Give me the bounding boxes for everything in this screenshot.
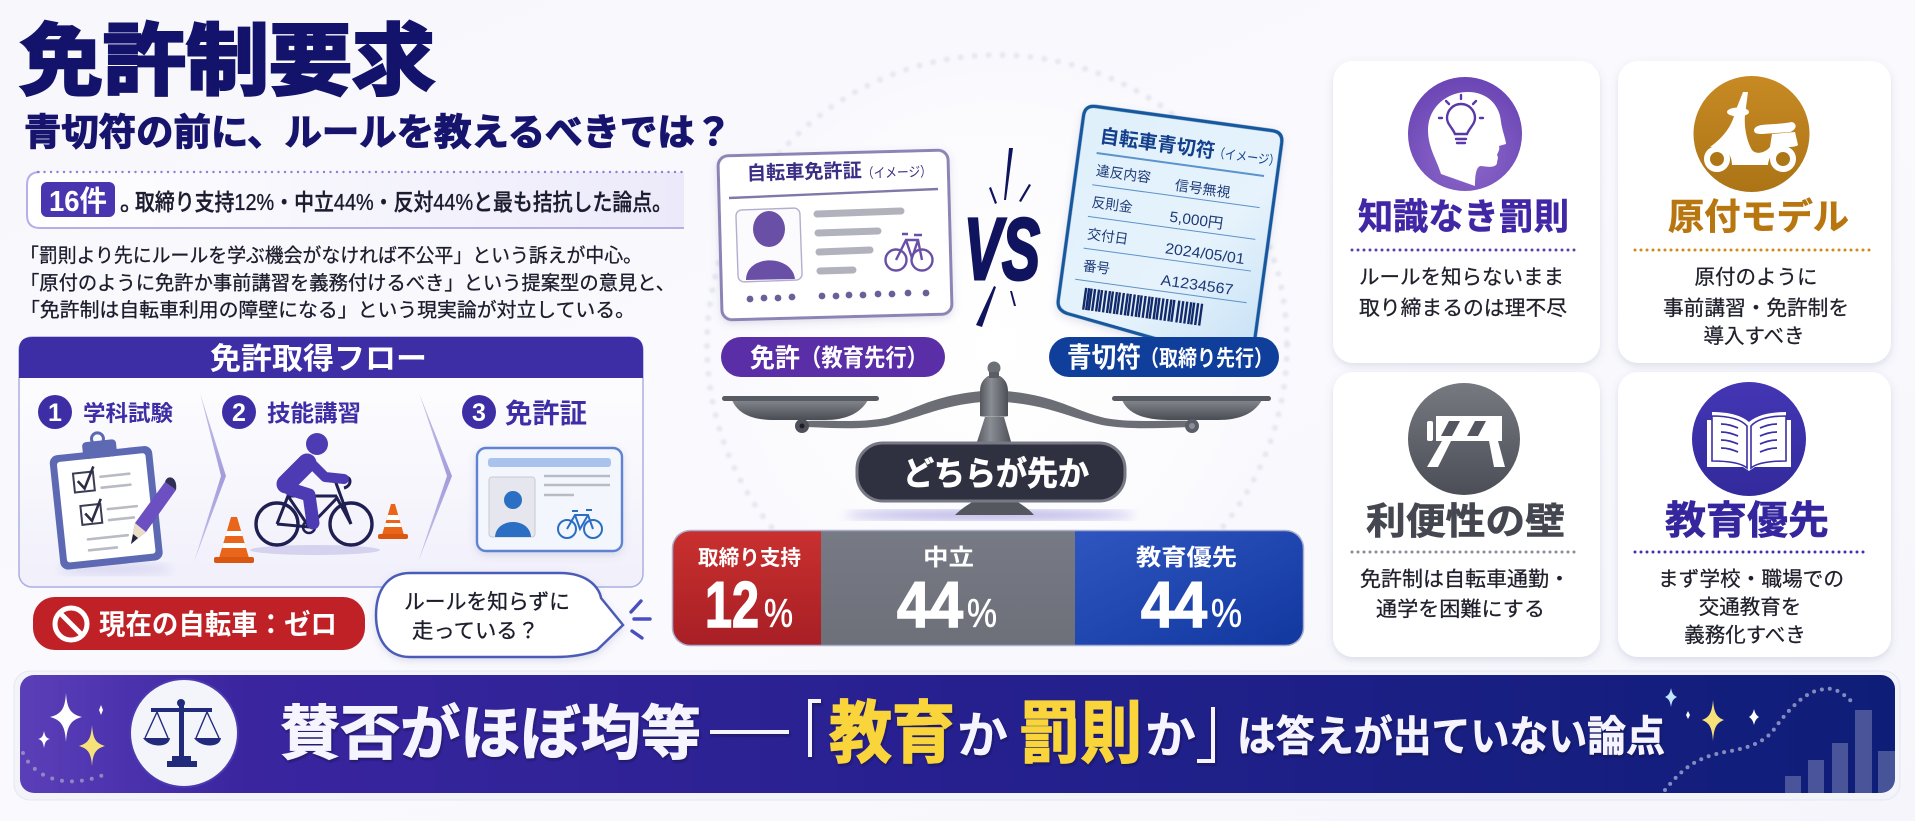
callout: current bicycle zero [33,597,365,650]
icon: open book [1692,382,1806,496]
card body: 導入すべき [1703,325,1805,348]
banner message: 教育 [829,696,955,772]
flow heading: 免許取得フロー [210,343,427,376]
stat: education first: 44 [1141,568,1207,641]
blue ticket illustration: 反則金 [1091,194,1134,215]
card title: 自転車免許証 [747,159,862,185]
scale plate: どちらが先か [903,455,1089,492]
card body [1359,266,1567,320]
right pan [1112,396,1271,433]
body paragraph: 「原付のように免許か事前講習を義務付けるべき」という提案型の意見と、 [20,272,675,294]
step 3 label: 免許証 [505,399,587,429]
step 3 label [462,395,587,429]
blue ticket illustration: （イメージ） [1213,145,1281,169]
body paragraph [20,245,675,322]
blue ticket illustration [1053,105,1284,366]
stat: education first: % [1211,592,1242,636]
left pan [722,396,879,433]
label: license: （教育先行） [800,345,928,372]
summary box [27,172,684,228]
card body: 交通教育を [1699,596,1801,619]
card heading: 利便性の壁 [1366,501,1565,542]
card body: 事前講習・免許制を [1663,297,1849,320]
icon: clipboard [47,427,176,575]
blue ticket illustration: 交付日 [1086,226,1129,247]
decoration: left sparkles [23,693,108,781]
title: 免許制要求 [20,17,435,105]
card body [1360,568,1570,621]
step 1 label: 学科試験 [83,401,173,426]
panel: convenience wall [1333,372,1600,657]
summary text: 取締り支持12%・中立44%・反対44%と最も拮抗した論点。 [135,189,672,215]
label: ticket: 青切符 [1067,342,1141,373]
speech bubble [376,573,623,657]
blue ticket illustration: 番号 [1082,257,1111,277]
card body: 通学を困難にする [1376,598,1545,621]
icon: scales of justice [130,679,238,787]
banner message: は答えが出ていない論点 [1237,713,1665,760]
card note: （イメージ） [862,164,932,181]
speech bubble: 走っている？ [412,620,539,643]
step 2 label: 2 [232,399,246,427]
stat: education first [1075,531,1303,645]
stat: enforcement support: 12 [705,568,759,641]
blue ticket illustration: 自転車青切符 [1098,125,1216,163]
icon: head with bulb [1408,77,1522,191]
label: license [721,337,945,377]
card body: 取り締まるのは理不尽 [1359,297,1567,320]
stat: neutral: 中立 [923,544,974,570]
icon: license card [477,448,622,551]
VS mark: VS [964,201,1040,298]
stat: enforcement support: % [764,592,793,636]
blue ticket illustration: 5,000円 [1168,209,1224,233]
icon: barricade [1408,383,1520,495]
decorative halo [707,55,1287,635]
card heading: 知識なき罰則 [1358,196,1569,237]
panel: education first [1618,372,1891,657]
card body: ルールを知らないまま [1359,266,1564,289]
banner message: 罰則 [1019,696,1142,772]
callout text: 現在の自転車：ゼロ [99,609,337,640]
blue ticket illustration: A1234567 [1160,272,1234,299]
icon: scooter [1694,76,1810,192]
step 3 label: 3 [472,399,486,427]
stat: neutral: 44 [897,568,963,641]
balance scale [722,362,1271,520]
subtitle: 青切符の前に、ルールを教えるべきでは？ [24,112,732,153]
body paragraph: 「罰則より先にルールを学ぶ機会がなければ不公平」という訴えが中心。 [20,245,642,267]
step 1 label: 1 [48,399,62,427]
arrow: step 1 to 2 [194,393,226,562]
decoration: right chart and sparkles [1665,688,1895,793]
card heading: 教育優先 [1665,500,1829,543]
label: ticket [1049,337,1279,377]
stat: enforcement support: 取締り支持 [698,547,801,570]
card body: 原付のように [1694,266,1818,289]
banner message: 賛否がほぼ均等 [280,701,701,767]
summary text: 。 [120,189,143,215]
card body: 免許制は自転車通勤・ [1360,568,1570,591]
card body [1658,568,1844,647]
step 2 label: 技能講習 [267,400,361,426]
banner message: か [957,708,1008,764]
blue ticket illustration: 違反内容 [1095,162,1152,186]
panel: no-knowledge penalty [1333,61,1600,363]
label: ticket: （取締り先行） [1140,346,1273,371]
license card illustration [718,150,952,320]
stat: enforcement support [673,531,821,645]
step 2 label [222,395,361,429]
scale plate [857,443,1125,501]
arrow: step 2 to 3 [418,393,452,562]
stat: neutral: % [967,592,997,636]
count badge: 16件 [49,185,107,218]
banner message [280,696,1665,772]
banner [14,671,1900,800]
blue ticket illustration: 2024/05/01 [1164,240,1246,268]
speech bubble: ルールを知らずに [404,591,570,614]
VS mark [964,148,1040,327]
icon: cyclist with cones [214,433,408,563]
blue ticket illustration: 信号無視 [1174,177,1232,200]
stat bar [672,530,1304,646]
card body: まず学校・職場での [1658,568,1844,591]
icon: emphasis marks [631,601,650,638]
stat: neutral [821,531,1075,645]
panel: moped model [1618,61,1891,363]
body paragraph: 「免許制は自転車利用の障壁になる」という現実論が対立している。 [20,300,635,322]
card body: 義務化すべき [1684,624,1806,647]
icon: prohibited [55,608,87,640]
step 1 label [38,395,173,429]
panel: license flow [19,337,643,587]
label: license: 免許 [750,343,800,373]
stat: education first: 教育優先 [1136,544,1237,570]
banner message: か [1145,708,1196,764]
card body [1663,266,1849,348]
card heading: 原付モデル [1668,196,1849,237]
